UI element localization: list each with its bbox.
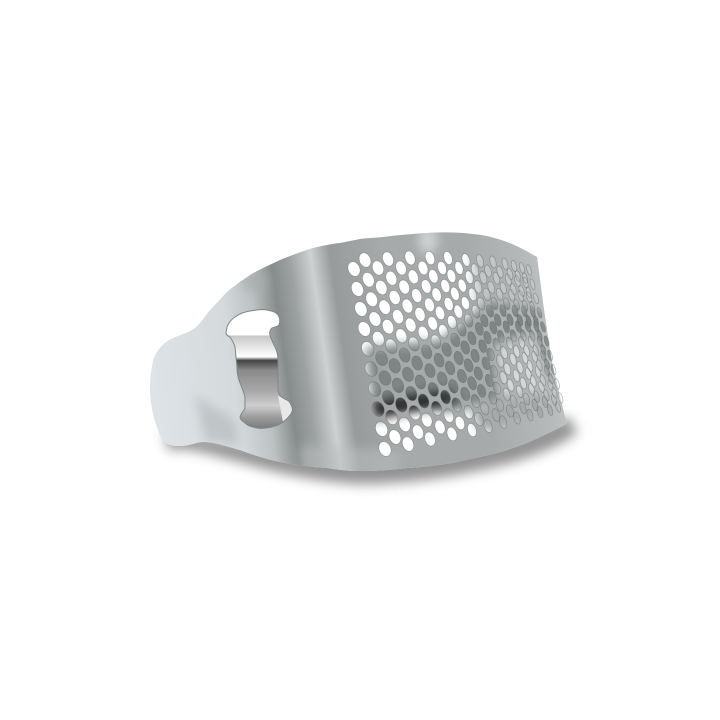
perforation rims [347, 251, 564, 456]
metal body with perforations and bottle opener [150, 226, 567, 480]
cylinder visible through the opener [228, 335, 283, 428]
pale strip under the dark one [470, 392, 565, 432]
grey inner wall band [365, 250, 565, 430]
bottle opener rim [226, 310, 292, 428]
product illustration: stainless steel garlic grater [150, 232, 583, 492]
shading on the metal [195, 226, 438, 480]
white wedge in the opener [278, 396, 293, 422]
drop shadow [165, 416, 578, 484]
interior seen through the holes [164, 251, 567, 471]
dark lower strip [370, 390, 458, 420]
